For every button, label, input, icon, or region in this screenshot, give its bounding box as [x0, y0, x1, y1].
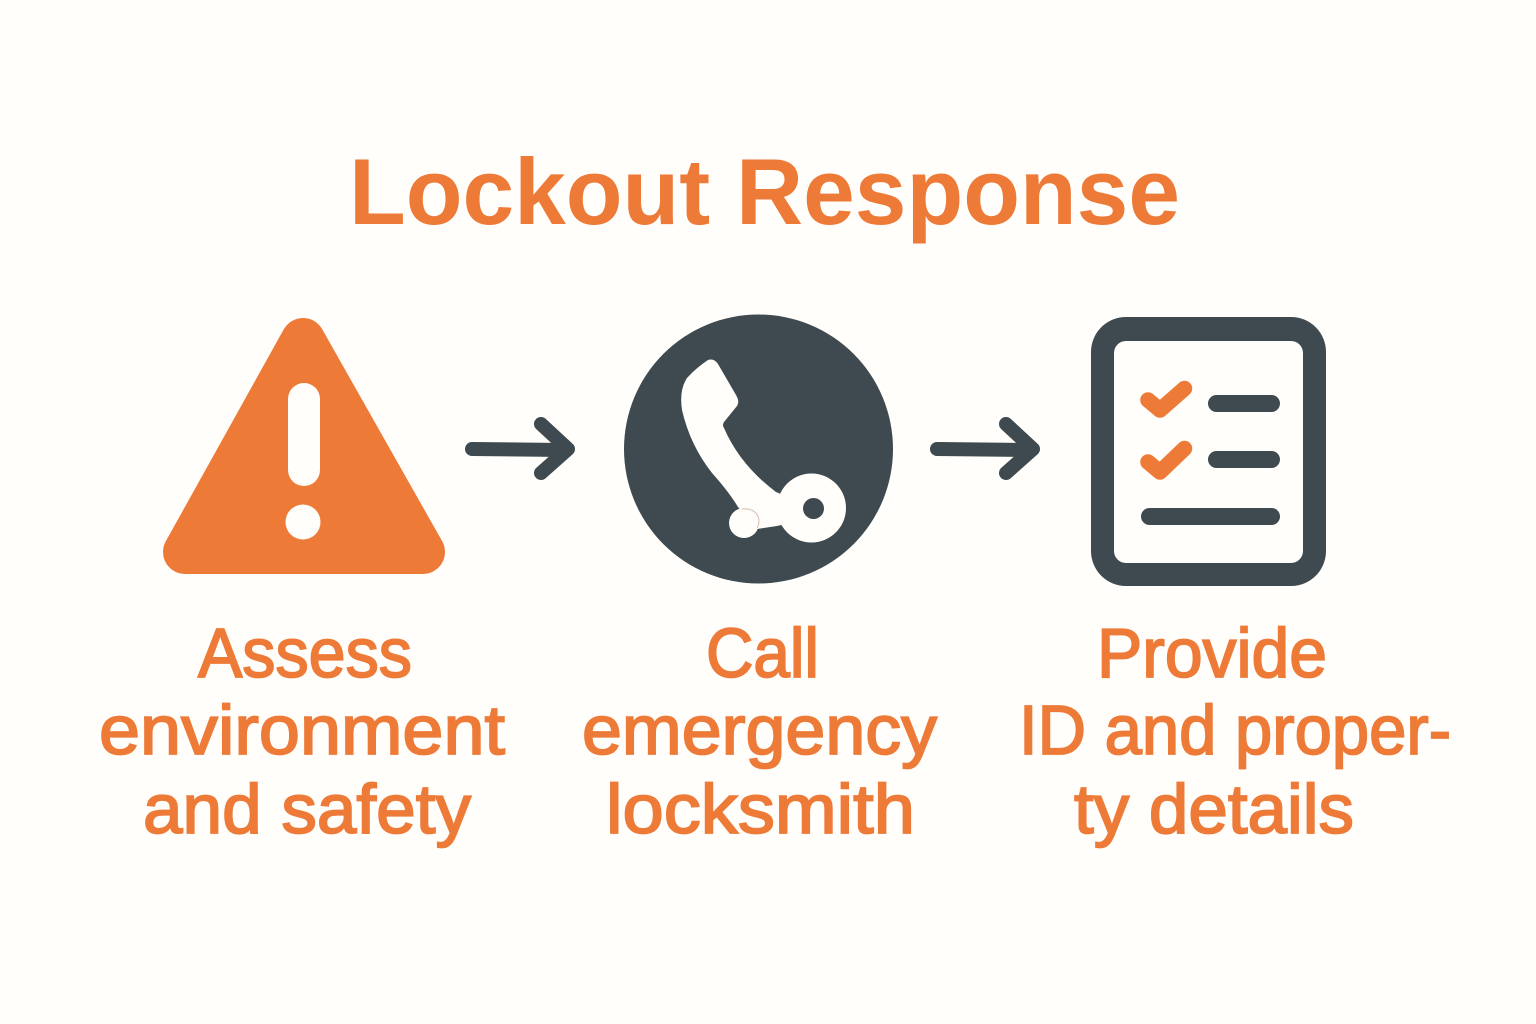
label: call emergency locksmith: locksmith: [606, 770, 915, 848]
icon: warning triangle: [185, 340, 423, 552]
label: provide ID and property details: [1019, 614, 1451, 848]
label: call emergency locksmith: emergency: [582, 691, 937, 769]
label: assess environment and safety: and safety: [143, 770, 471, 848]
label: assess environment and safety: Assess: [198, 614, 412, 692]
label: provide ID and property details: ty details: [1074, 770, 1354, 848]
title: Lockout Response: [349, 139, 1180, 244]
arrow: assess to call: [472, 424, 568, 473]
label: call emergency locksmith: [582, 614, 937, 848]
label: assess environment and safety: environment: [99, 691, 505, 769]
label: provide ID and property details: ID and proper-: [1019, 691, 1451, 769]
label: call emergency locksmith: Call: [706, 614, 819, 692]
label: provide ID and property details: Provide: [1097, 614, 1327, 692]
label: assess environment and safety: [99, 614, 505, 848]
icon: checklist: [1091, 317, 1326, 586]
icon: phone with key: [624, 314, 893, 584]
arrow: call to provide: [937, 424, 1033, 473]
